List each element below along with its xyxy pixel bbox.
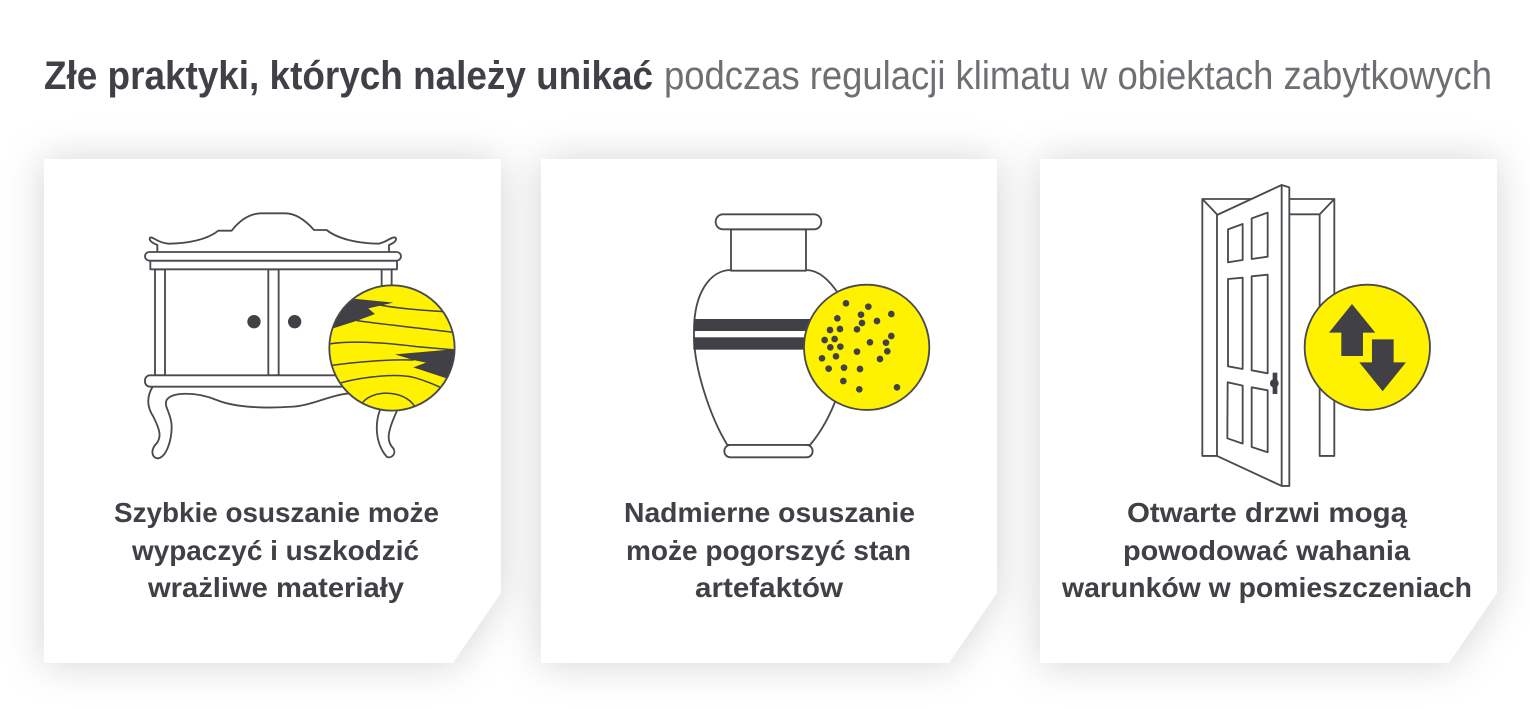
- caption: open doors: warunków w pomieszczeniach: [1061, 572, 1472, 603]
- caption: open doors: Otwarte drzwi mogą: [1127, 497, 1408, 528]
- caption: fast drying: Szybkie osuszanie może: [114, 497, 439, 528]
- icon: open door: [1202, 185, 1430, 486]
- card background: [1040, 159, 1497, 663]
- caption: fast drying: wypaczyć i uszkodzić: [131, 535, 419, 566]
- caption: excessive drying: [624, 497, 915, 603]
- caption: excessive drying: Nadmierne osuszanie: [624, 497, 915, 528]
- card background: [541, 159, 997, 663]
- door frame and door: [1202, 185, 1334, 486]
- icon: antique cabinet with cracks: [145, 213, 457, 458]
- caption: fast drying: wrażliwe materiały: [147, 572, 405, 603]
- title: Złe praktyki, których należy unikać: [44, 54, 653, 98]
- caption: open doors: [1061, 497, 1472, 603]
- cabinet: [145, 213, 401, 458]
- icon: vase with spots: [693, 214, 929, 457]
- card background: [44, 159, 501, 663]
- caption: fast drying: [114, 497, 439, 603]
- caption: excessive drying: może pogorszyć stan: [626, 535, 911, 566]
- caption: open doors: powodować wahania: [1123, 535, 1411, 566]
- panel: fast drying: [44, 159, 501, 663]
- caption: excessive drying: artefaktów: [695, 572, 844, 603]
- panel: excessive drying: [541, 159, 997, 663]
- panel: open doors: [1040, 159, 1497, 663]
- title: [44, 54, 1492, 98]
- magnifier: spots: [804, 285, 929, 410]
- vase: [693, 214, 838, 457]
- magnifier: up and down arrows: [1305, 285, 1430, 410]
- magnifier: cracked wood: [328, 285, 457, 411]
